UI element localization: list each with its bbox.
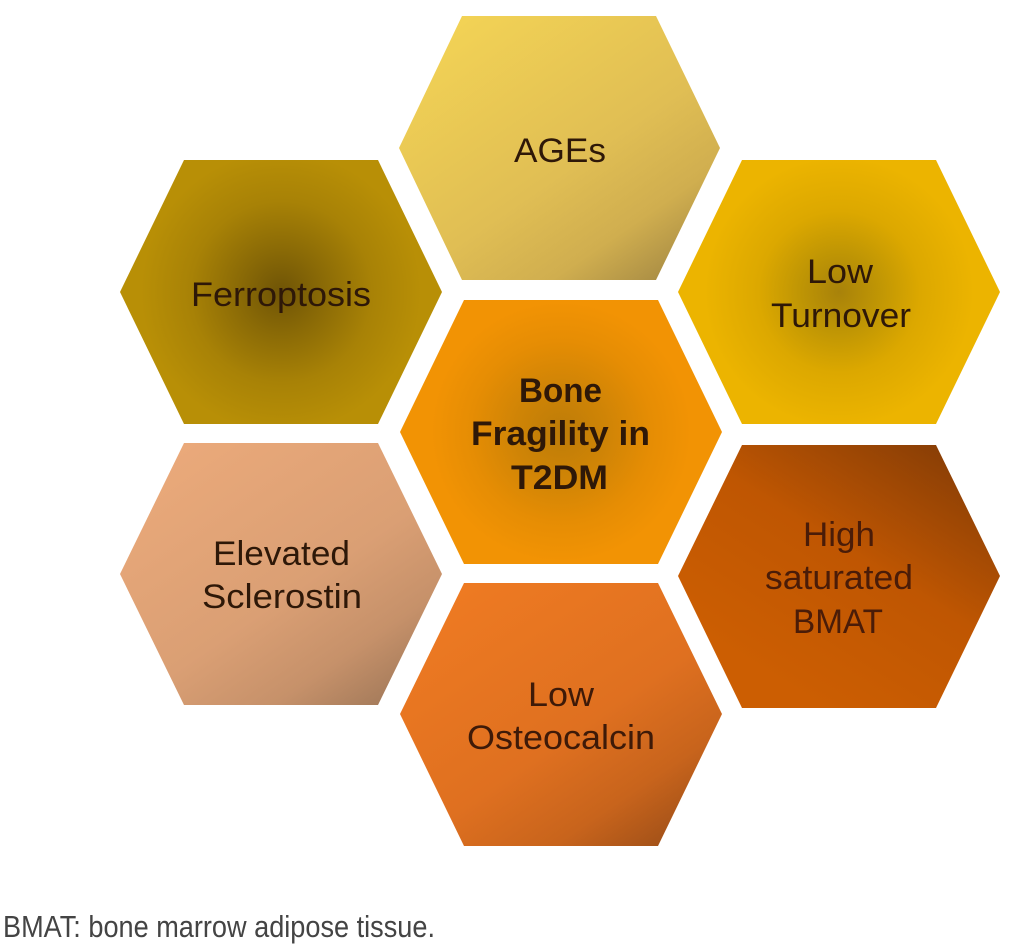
hexagon: High saturated BMAT: BMAT	[793, 603, 883, 641]
hexagon: Bone Fragility in T2DM (centre)	[400, 300, 722, 564]
hexagon: High saturated BMAT: High	[803, 516, 875, 554]
hexagon: Low Turnover: Low	[807, 253, 873, 291]
footnote: BMAT: bone marrow adipose tissue.	[3, 909, 435, 944]
hexagon: High saturated BMAT: saturated	[765, 559, 913, 597]
hexagon: Bone Fragility in T2DM (centre): T2DM	[511, 459, 608, 497]
hexagon: Low Osteocalcin: Low	[528, 676, 594, 714]
hexagon: Ferroptosis: Ferroptosis	[191, 276, 371, 314]
hexagon: AGEs	[399, 16, 720, 280]
hexagon: Low Turnover	[678, 160, 1000, 424]
hexagon: Elevated Sclerostin: Sclerostin	[202, 578, 362, 616]
hexagon: Elevated Sclerostin: Elevated	[213, 535, 350, 573]
hexagon: Low Turnover: Turnover	[771, 297, 911, 335]
hexagon: Low Osteocalcin: Osteocalcin	[467, 719, 655, 757]
hexagon: High saturated BMAT	[678, 445, 1000, 708]
hexagon: Bone Fragility in T2DM (centre): Fragility in	[471, 415, 650, 453]
hexagon: AGEs: AGEs	[514, 132, 606, 170]
hexagon: Ferroptosis	[120, 160, 442, 424]
hexagon: Elevated Sclerostin	[120, 443, 442, 705]
hexagon: Low Osteocalcin	[400, 583, 722, 846]
hexagon: Bone Fragility in T2DM (centre): Bone	[519, 372, 602, 410]
